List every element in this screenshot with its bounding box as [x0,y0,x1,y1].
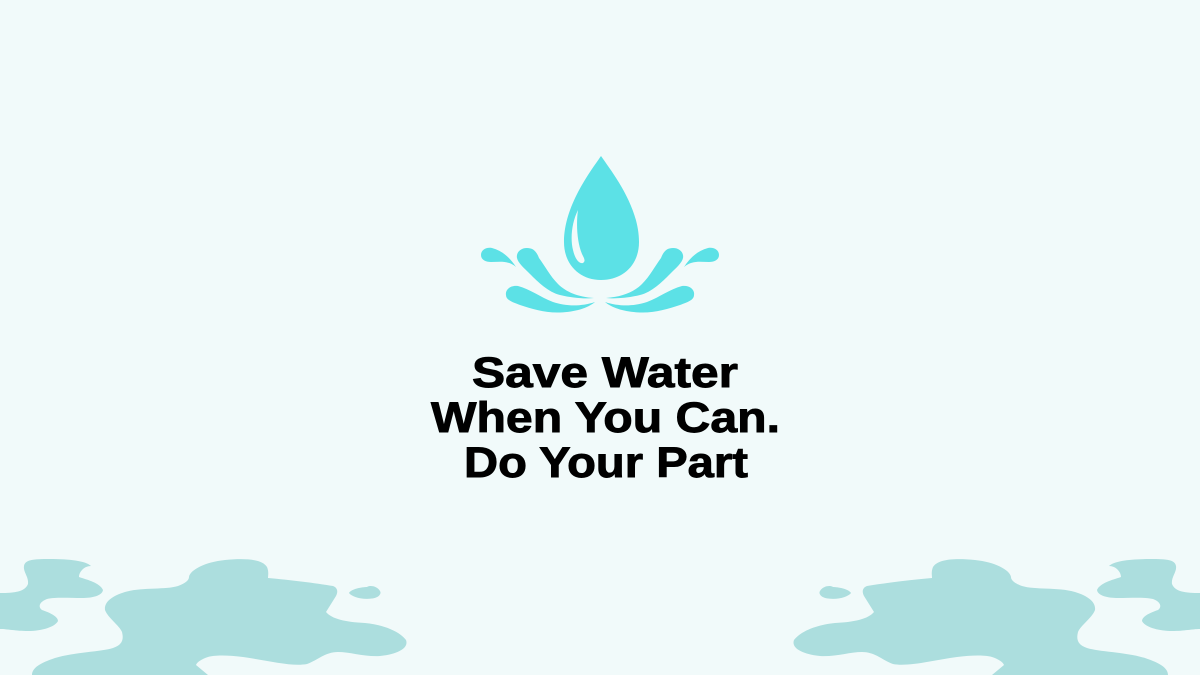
title: Save Water [472,349,738,397]
water drop [564,156,639,280]
icon: water drop with splash [481,156,719,313]
right splash [605,248,719,313]
puddles: bottom left [0,559,406,675]
title: Do Your Part [464,439,748,487]
puddles: bottom right [794,559,1200,675]
left splash [481,248,595,313]
title: When You Can. [431,394,780,442]
title [431,349,780,487]
drop highlight [572,210,585,263]
